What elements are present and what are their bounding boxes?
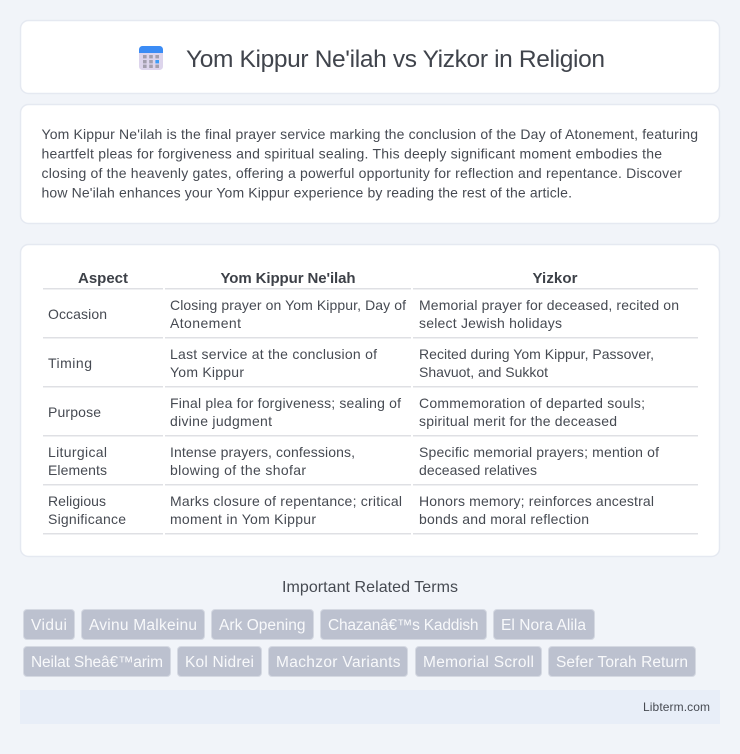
table row: Purpose: spiritual merit for the deceased [419, 413, 617, 429]
table row: Purpose: Final plea for forgiveness; sealing of [170, 395, 401, 411]
tag: Neilat Shearim: Neilat Sheâ€™arim [31, 654, 163, 671]
table header row [43, 270, 698, 290]
table row: Occasion: Atonement [170, 315, 241, 331]
tag: Chazan's Kaddish [320, 610, 486, 640]
tag: Chazan's Kaddish: Chazanâ€™s Kaddish [328, 617, 478, 634]
table row: Timing [43, 346, 698, 388]
table row: Occasion: Closing prayer on Yom Kippur, Day of [170, 297, 406, 313]
table row: Liturgical Elements: deceased relatives [419, 462, 537, 478]
table row: Timing: Shavuot, and Sukkot [419, 364, 548, 380]
related terms heading: Important Related Terms [282, 579, 458, 596]
description text: Yom Kippur Ne'ilah is the final prayer service marking the conclusion of the Day of Atonement, featuring [42, 126, 698, 142]
tag: Sefer Torah Return: Sefer Torah Return [556, 654, 688, 671]
table row: Occasion: select Jewish holidays [419, 315, 562, 331]
tag: Avinu Malkeinu [82, 610, 204, 640]
footer source text: Libterm.com [643, 700, 710, 714]
table header row: Yizkor [532, 270, 578, 287]
table row: Timing: Timing [48, 355, 92, 371]
title: Yom Kippur Ne'ilah vs Yizkor in Religion [186, 46, 605, 73]
table row: Occasion [43, 297, 698, 338]
table row: Religious Significance: bonds and moral reflection [419, 511, 589, 527]
tag: Neilat Shearim [24, 646, 170, 676]
tag: Vidui: Vidui [31, 617, 67, 634]
table row: Purpose: divine judgment [170, 413, 272, 429]
table row: Religious Significance: Religious [48, 493, 106, 509]
table header row: Aspect [78, 270, 128, 287]
footer [20, 690, 720, 724]
tag: El Nora Alila: El Nora Alila [501, 617, 586, 634]
tag: Kol Nidrei [178, 646, 262, 676]
table row: Religious Significance: moment in Yom Kippur [170, 511, 316, 527]
table row: Religious Significance [43, 493, 698, 534]
panel: comparison table [20, 244, 720, 556]
tag: Machzor Variants [268, 646, 408, 676]
table row: Timing: Recited during Yom Kippur, Passover, [419, 346, 654, 362]
tag: Machzor Variants: Machzor Variants [276, 654, 401, 671]
description text: closing of the heavenly gates, offering a powerful opportunity for reflection and repentance. Discover [42, 165, 682, 181]
tag: Kol Nidrei: Kol Nidrei [185, 654, 254, 671]
table row: Timing: Yom Kippur [170, 364, 244, 380]
tag: Memorial Scroll [416, 646, 542, 676]
table row: Liturgical Elements: blowing of the shofar [170, 462, 306, 478]
related terms tags [24, 610, 696, 676]
tag: Memorial Scroll: Memorial Scroll [423, 654, 534, 671]
description text [42, 126, 698, 200]
table row: Purpose: Purpose [48, 404, 101, 420]
tag: El Nora Alila [494, 610, 594, 640]
table row: Liturgical Elements [43, 444, 698, 486]
tag: Sefer Torah Return [548, 646, 696, 676]
table row: Liturgical Elements: Liturgical [48, 444, 107, 460]
table row: Religious Significance: Marks closure of repentance; critical [170, 493, 402, 509]
table row: Purpose [43, 395, 698, 436]
panel: title card [20, 20, 720, 94]
tag: Vidui [24, 610, 74, 640]
table row: Occasion: Occasion [48, 306, 107, 322]
icon: calendar [139, 46, 163, 70]
panel: description [20, 104, 720, 224]
description text: how Ne'ilah enhances your Yom Kippur experience by reading the rest of the article. [42, 184, 572, 200]
table row: Liturgical Elements: Specific memorial prayers; mention of [419, 444, 659, 460]
table row: Religious Significance: Honors memory; reinforces ancestral [419, 493, 654, 509]
table row: Religious Significance: Significance [48, 511, 126, 527]
table row: Liturgical Elements: Elements [48, 462, 107, 478]
table row: Liturgical Elements: Intense prayers, confessions, [170, 444, 355, 460]
table header row: Yom Kippur Ne'ilah [220, 270, 356, 287]
tag: Ark Opening [212, 610, 314, 640]
table row: Occasion: Memorial prayer for deceased, recited on [419, 297, 679, 313]
table row: Timing: Last service at the conclusion of [170, 346, 377, 362]
tag: Avinu Malkeinu: Avinu Malkeinu [89, 617, 197, 634]
description text: heartfelt pleas for forgiveness and spiritual sealing. This deeply significant moment embodies the [42, 146, 662, 162]
tag: Ark Opening: Ark Opening [219, 617, 306, 634]
table row: Purpose: Commemoration of departed souls; [419, 395, 645, 411]
